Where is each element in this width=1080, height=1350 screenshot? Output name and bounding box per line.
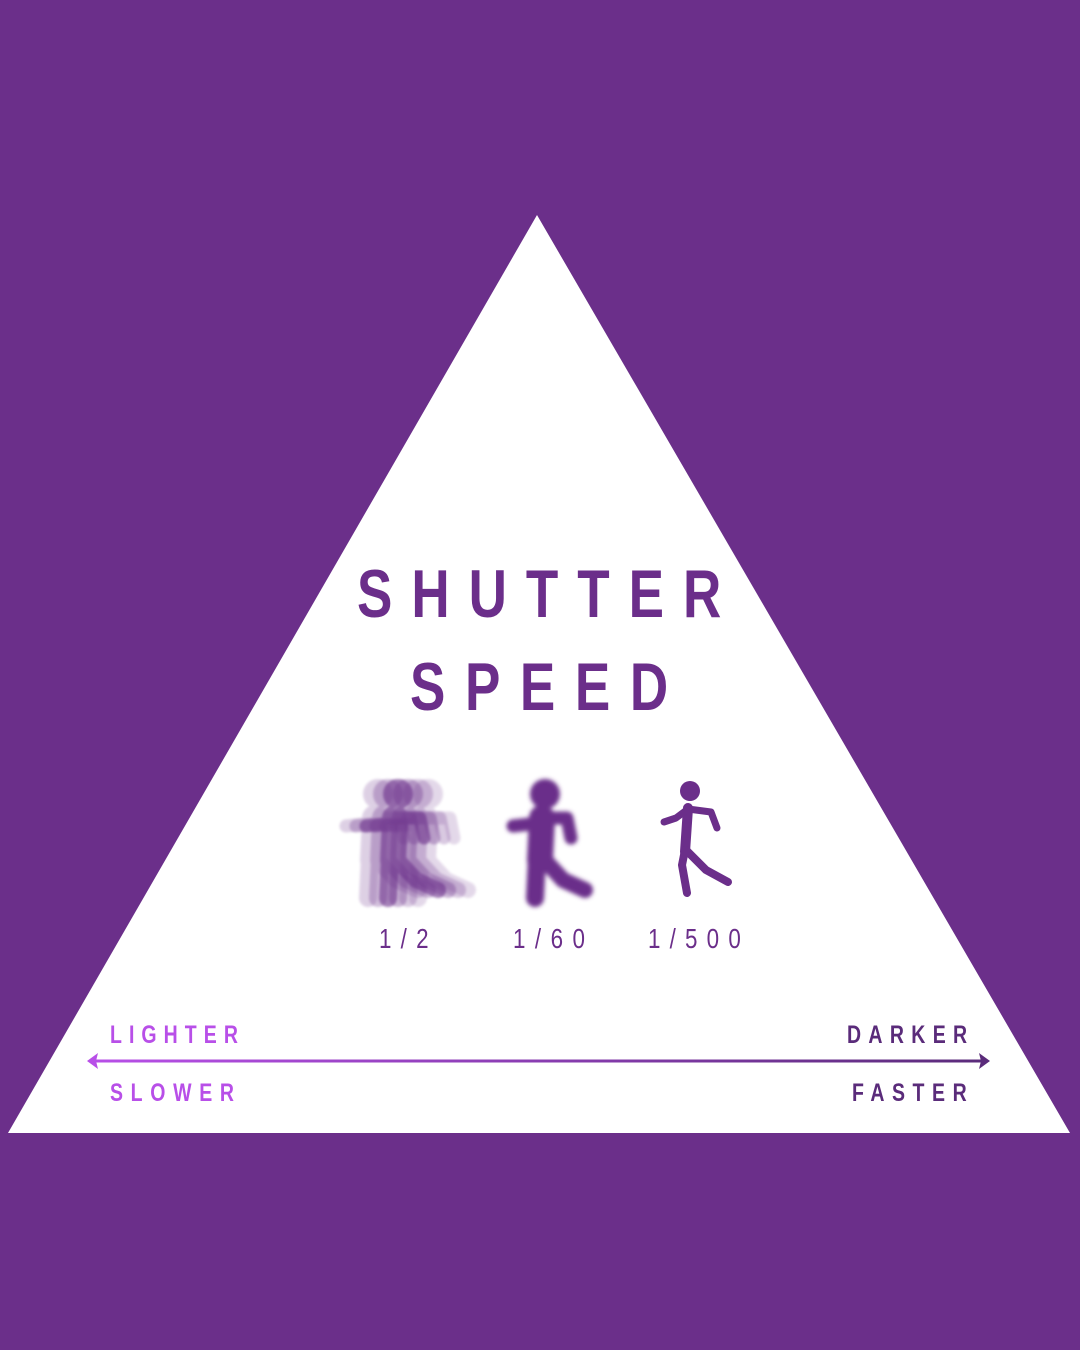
title: SPEED bbox=[410, 649, 668, 724]
scale labels: FASTER bbox=[852, 1079, 967, 1107]
scale labels bbox=[110, 1021, 967, 1107]
scale labels: DARKER bbox=[847, 1021, 967, 1049]
speed labels: 1/60 bbox=[513, 924, 585, 955]
icon: slightly blurred runner 1/60 bbox=[513, 779, 585, 898]
title bbox=[357, 556, 721, 724]
scale labels: SLOWER bbox=[110, 1079, 234, 1107]
speed labels bbox=[379, 924, 741, 955]
title: SHUTTER bbox=[357, 556, 721, 631]
scale arrow bbox=[87, 1053, 990, 1069]
speed labels: 1/500 bbox=[648, 924, 741, 955]
triangle panel bbox=[8, 215, 1070, 1133]
icon: sharp runner 1/500 bbox=[664, 781, 728, 893]
speed labels: 1/2 bbox=[379, 924, 429, 955]
icon: very blurred runner 1/2 bbox=[346, 779, 468, 898]
scale labels: LIGHTER bbox=[110, 1021, 238, 1049]
